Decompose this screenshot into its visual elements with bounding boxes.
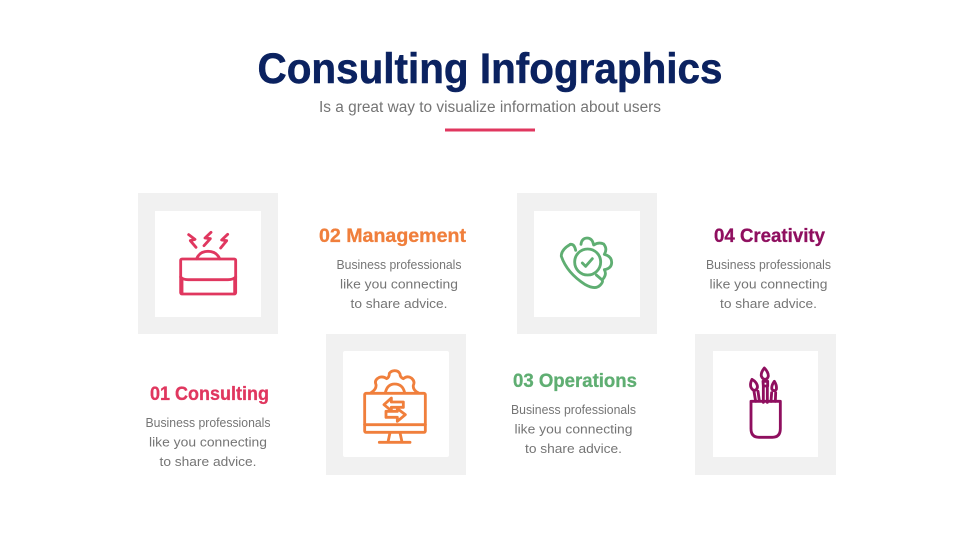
heading: 03 operations: 03 Operations xyxy=(513,371,637,392)
text block: 04 creativity xyxy=(706,226,831,311)
icon: briefcase with lightning bolts xyxy=(181,232,236,294)
panel: management icon card xyxy=(326,334,466,475)
heading: 01 consulting: 01 Consulting xyxy=(150,384,269,405)
heading: 02 management: 02 Management xyxy=(319,226,467,247)
subtitle: Is a great way to visualize information about users xyxy=(319,99,661,116)
text block: 03 operations xyxy=(511,371,637,456)
body: 01 consulting: to share advice. xyxy=(160,454,256,469)
body: 01 consulting: Business professionals xyxy=(146,415,271,430)
body: 02 management: like you connecting xyxy=(340,276,458,292)
icon: monitor with gear and arrows xyxy=(365,371,425,442)
body: 03 operations: to share advice. xyxy=(525,441,622,456)
panel: consulting icon card xyxy=(138,193,278,334)
body: 01 consulting: like you connecting xyxy=(149,434,267,450)
body: 04 creativity: to share advice. xyxy=(720,296,817,311)
body: 02 management: Business professionals xyxy=(336,257,462,272)
icon: phone with gear and check xyxy=(561,238,612,288)
body: 02 management: to share advice. xyxy=(350,296,448,311)
body: 03 operations: Business professionals xyxy=(511,402,636,417)
body: 04 creativity: like you connecting xyxy=(710,276,828,292)
heading: 04 creativity: 04 Creativity xyxy=(714,226,825,247)
body: 04 creativity: Business professionals xyxy=(706,257,831,272)
title: Consulting Infographics xyxy=(258,45,722,93)
title underline xyxy=(445,128,535,132)
icon: brushes in a cup xyxy=(751,368,780,437)
text block: 01 consulting xyxy=(146,384,271,469)
panel: operations icon card xyxy=(517,193,657,334)
body: 03 operations: like you connecting xyxy=(514,422,632,436)
text block: 02 management xyxy=(319,226,467,311)
panel: creativity icon card xyxy=(695,334,836,475)
